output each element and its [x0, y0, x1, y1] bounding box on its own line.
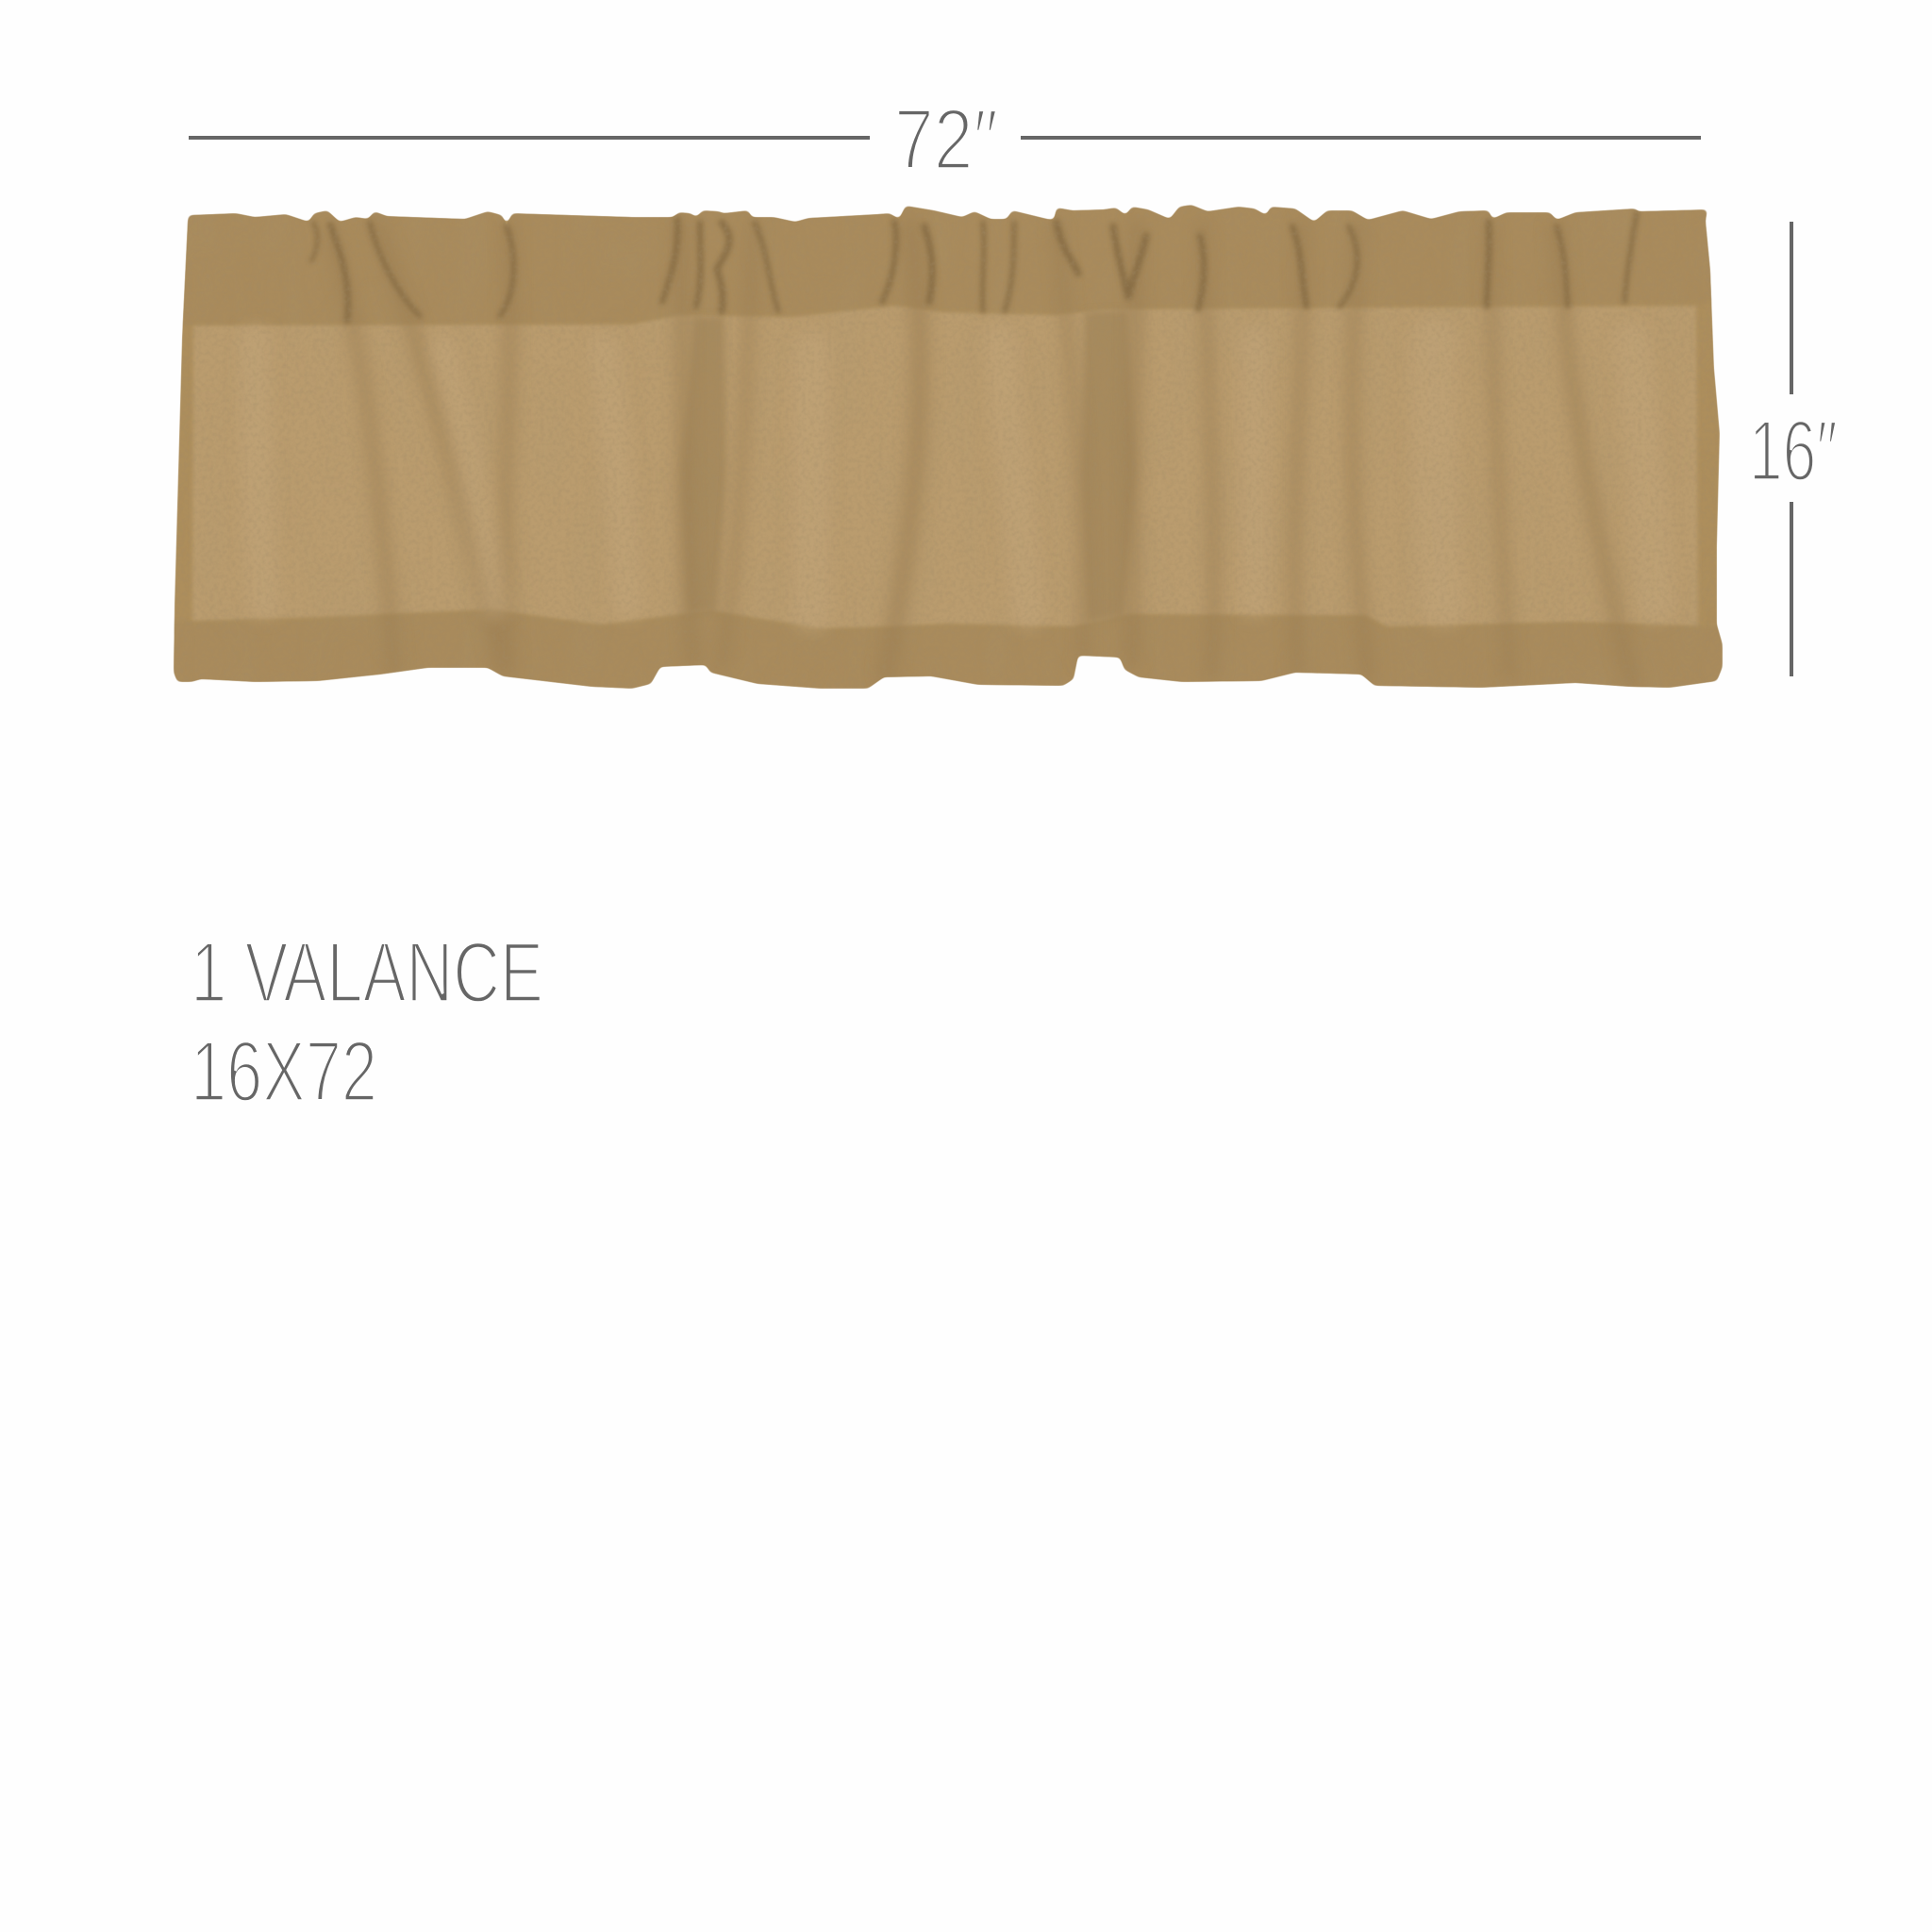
fabric mottling — [160, 198, 1745, 698]
width dimension: 72 inches — [189, 92, 1701, 188]
dimension line left — [189, 136, 870, 140]
dimension line top — [1790, 222, 1793, 394]
sheer overlapped fabric sections — [681, 309, 1136, 623]
highlight strips — [458, 446, 1030, 630]
dimension line bottom — [1790, 502, 1793, 676]
height label: 16″ — [1749, 404, 1838, 499]
broad body folds — [347, 306, 1626, 628]
curtain silhouette — [174, 205, 1723, 689]
product description — [191, 925, 543, 1120]
width label: 72″ — [894, 92, 998, 188]
product size: 16X72 — [191, 1024, 377, 1120]
burlap valance curtain — [174, 205, 1723, 689]
gathered header creases — [311, 213, 1637, 321]
light centre panel — [192, 305, 1698, 629]
header band — [183, 205, 1711, 325]
product name: 1 VALANCE — [191, 925, 543, 1021]
hem band — [174, 621, 1723, 689]
height dimension: 16 inches — [1749, 222, 1838, 676]
dimension line right — [1021, 136, 1701, 140]
burlap weave grain — [207, 227, 1690, 615]
